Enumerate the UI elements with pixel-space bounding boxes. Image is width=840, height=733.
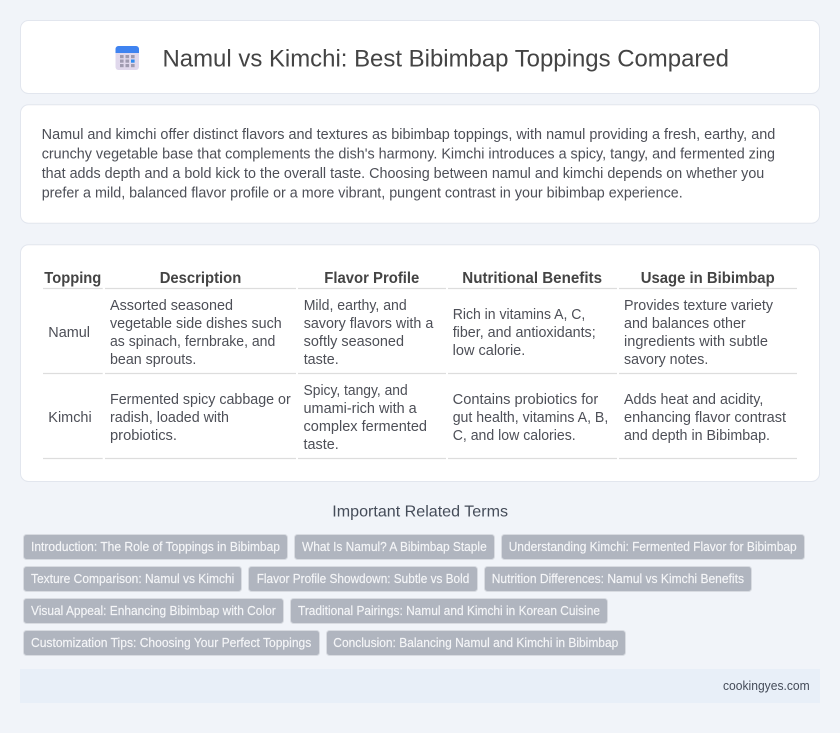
panel: comparison table: [20, 245, 820, 482]
panel: introduction: [20, 105, 820, 223]
table row: Kimchi: Kimchi: [48, 410, 92, 426]
table row: Namul: low calorie.: [453, 343, 525, 359]
tag: what is namul: What Is Namul? A Bibimbap Staple: [302, 540, 487, 554]
tag: flavor profile showdown: Flavor Profile Showdown: Subtle vs Bold: [257, 572, 469, 586]
tag: texture comparison: Texture Comparison: Namul vs Kimchi: [31, 572, 234, 586]
table row: Namul: taste.: [304, 352, 339, 368]
tag: visual appeal: Visual Appeal: Enhancing Bibimbap with Color: [31, 604, 276, 618]
table row: Kimchi: umami-rich with a: [304, 401, 417, 417]
heading: important related terms: Important Related Terms: [332, 504, 508, 521]
intro paragraph: that adds depth and a bold kick to the overall taste. Choosing between namul and kimchi depends on whether you: [42, 166, 764, 182]
table row: Namul: bean sprouts.: [110, 352, 196, 368]
tag: introduction: [24, 534, 288, 560]
table header row: Usage in Bibimbap: [641, 270, 775, 287]
related term tags: [24, 534, 804, 656]
tag: nutrition differences: Nutrition Differences: Namul vs Kimchi Benefits: [492, 572, 744, 586]
table row: Kimchi: Fermented spicy cabbage or: [110, 392, 291, 408]
table row: Kimchi: Adds heat and acidity,: [624, 392, 763, 408]
table row: Kimchi: Spicy, tangy, and: [304, 383, 408, 399]
tag: flavor profile showdown: [248, 566, 478, 592]
tag: what is namul: [294, 534, 494, 560]
tag: visual appeal: [24, 598, 284, 624]
table row: Namul: as spinach, fernbrake, and: [110, 334, 275, 350]
table row: Namul: savory notes.: [624, 352, 708, 368]
table row: Kimchi: [43, 383, 797, 458]
table row: Namul: softly seasoned: [304, 334, 404, 350]
table row: Namul: ingredients with subtle: [624, 334, 768, 350]
tag: conclusion: Conclusion: Balancing Namul and Kimchi in Bibimbap: [333, 636, 618, 650]
table row: Namul: [43, 298, 797, 374]
table row: Kimchi: probiotics.: [110, 428, 177, 444]
intro paragraph: [42, 127, 775, 202]
table row: Kimchi: radish, loaded with: [110, 410, 229, 426]
table row: Namul: Rich in vitamins A, C,: [453, 307, 585, 323]
intro paragraph: Namul and kimchi offer distinct flavors and textures as bibimbap toppings, with namul providing a fresh, earthy, and: [42, 127, 775, 143]
panel: title header: [20, 20, 820, 94]
table header row: [43, 270, 797, 288]
table row: Namul: fiber, and antioxidants;: [453, 325, 596, 341]
title: Namul vs Kimchi: Best Bibimbap Toppings Compared: [162, 46, 729, 73]
table row: Kimchi: gut health, vitamins A, B,: [453, 410, 608, 426]
table row: Namul: and balances other: [624, 316, 746, 332]
table header row: Flavor Profile: [324, 270, 419, 287]
table row: Namul: Mild, earthy, and: [304, 298, 407, 314]
table row: Kimchi: and depth in Bibimbap.: [624, 428, 770, 444]
table row: Kimchi: C, and low calories.: [453, 428, 576, 444]
intro paragraph: crunchy vegetable base that complements the dish's harmony. Kimchi introduces a spicy, tangy, and fermented zing: [42, 146, 775, 162]
table row: Namul: savory flavors with a: [304, 316, 433, 332]
tag: nutrition differences: [484, 566, 752, 592]
table row: Kimchi: taste.: [304, 437, 339, 453]
table header row: Topping: [44, 270, 101, 287]
intro paragraph: prefer a mild, balanced flavor profile or a more vibrant, pungent contrast in your bibimbap experience.: [42, 186, 683, 202]
table header row: Description: [160, 270, 241, 287]
tag: understanding kimchi: Understanding Kimchi: Fermented Flavor for Bibimbap: [509, 540, 797, 554]
table row: Namul: vegetable side dishes such: [110, 316, 282, 332]
tag: customization tips: Customization Tips: Choosing Your Perfect Toppings: [31, 636, 311, 650]
tag: traditional pairings: Traditional Pairings: Namul and Kimchi in Korean Cuisine: [298, 604, 600, 618]
tag: texture comparison: [24, 566, 242, 592]
table row: Kimchi: Contains probiotics for: [453, 392, 598, 408]
tag: understanding kimchi: [502, 534, 804, 560]
table row: Namul: Assorted seasoned: [110, 298, 233, 314]
table row: Namul: Namul: [48, 325, 90, 341]
table row: Namul: Provides texture variety: [624, 298, 774, 314]
tag: conclusion: [326, 630, 626, 656]
table row: Kimchi: complex fermented: [304, 419, 427, 435]
footer band: [20, 669, 820, 703]
table header row: Nutritional Benefits: [462, 270, 602, 287]
footer source: cookingyes.com: [723, 679, 810, 693]
tag: introduction: Introduction: The Role of Toppings in Bibimbap: [31, 540, 280, 554]
table row: Kimchi: enhancing flavor contrast: [624, 410, 786, 426]
icon: calendar: [116, 46, 139, 70]
tag: customization tips: [24, 630, 320, 656]
tag: traditional pairings: [290, 598, 608, 624]
